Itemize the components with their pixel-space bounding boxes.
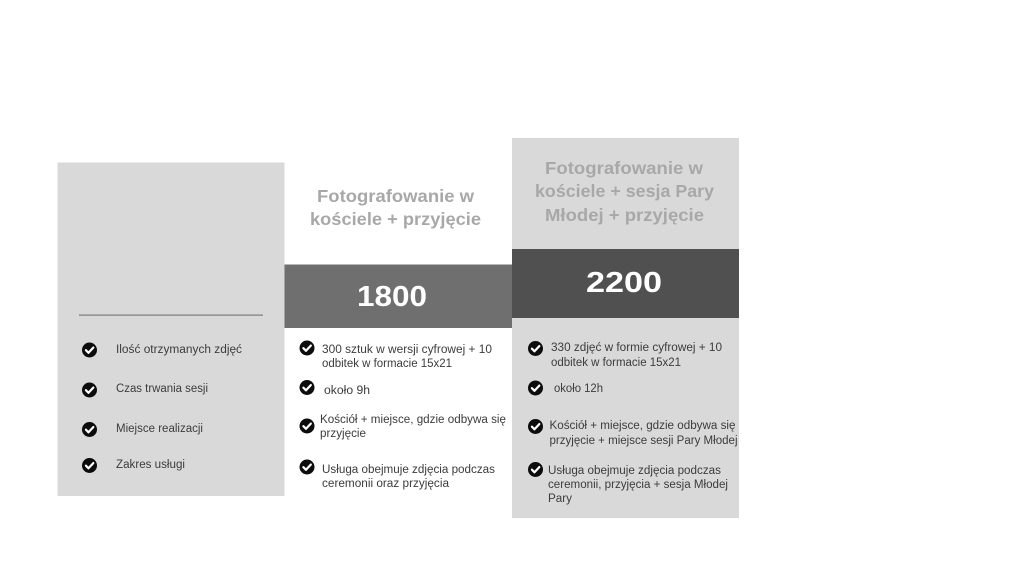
item: photos included: odbitek w formacie 15x21 xyxy=(322,358,452,370)
item: scope xyxy=(300,460,495,490)
heading: package 2200: Fotografowanie w xyxy=(545,158,703,178)
criterion: session duration: Czas trwania sesji xyxy=(116,383,208,395)
item: photos included: 300 sztuk w wersji cyfrowej + 10 xyxy=(322,344,492,356)
item: location xyxy=(528,419,738,447)
price band: 2200 xyxy=(512,249,739,318)
item: scope: Usługa obejmuje zdjęcia podczas xyxy=(322,464,495,476)
item: duration: około 9h xyxy=(324,385,370,397)
item: photos included: 330 zdjęć w formie cyfrowej + 10 xyxy=(551,342,722,354)
item: location xyxy=(300,414,506,440)
item: scope xyxy=(528,462,728,505)
item: duration: około 12h xyxy=(554,383,603,395)
item: location: Kościół + miejsce, gdzie odbywa się xyxy=(550,420,736,432)
price band: 1800: 1800 xyxy=(357,281,427,313)
heading: package 2200: Młodej + przyjęcie xyxy=(545,205,704,225)
item: scope: Usługa obejmuje zdjęcia podczas xyxy=(548,465,721,477)
criterion: number of photos xyxy=(82,342,242,358)
item: duration xyxy=(300,380,370,397)
item: scope: Pary xyxy=(548,493,572,505)
item: location: Kościół + miejsce, gdzie odbywa się xyxy=(320,414,506,426)
item: scope: ceremonii oraz przyjęcia xyxy=(322,478,450,490)
criterion: session duration xyxy=(82,382,208,398)
item: location: przyjęcie xyxy=(320,428,366,440)
heading: package 1800: kościele + przyjęcie xyxy=(310,209,481,229)
heading: package 1800 xyxy=(310,186,481,229)
heading: package 2200 xyxy=(535,158,714,225)
price band: 1800 xyxy=(284,264,512,328)
heading: package 2200: kościele + sesja Pary xyxy=(535,181,714,201)
criterion: service scope: Zakres usługi xyxy=(116,459,185,471)
criterion: location: Miejsce realizacji xyxy=(116,423,203,435)
criterion: location xyxy=(82,422,203,437)
panel: package 2200 xyxy=(512,138,739,518)
item: photos included xyxy=(528,341,722,369)
criterion: number of photos: Ilość otrzymanych zdjęć xyxy=(116,344,242,356)
item: duration xyxy=(528,380,603,396)
item: photos included: odbitek w formacie 15x21 xyxy=(551,357,681,369)
item: photos included xyxy=(300,340,492,370)
panel: service criteria xyxy=(58,162,284,496)
heading: package 1800: Fotografowanie w xyxy=(317,186,474,206)
panel: package 1800 xyxy=(284,186,512,490)
item: scope: ceremonii, przyjęcia + sesja Młodej xyxy=(548,479,728,491)
criterion: service scope xyxy=(82,458,185,473)
price band: 2200: 2200 xyxy=(586,267,662,299)
item: location: przyjęcie + miejsce sesji Pary Młodej xyxy=(550,435,738,447)
